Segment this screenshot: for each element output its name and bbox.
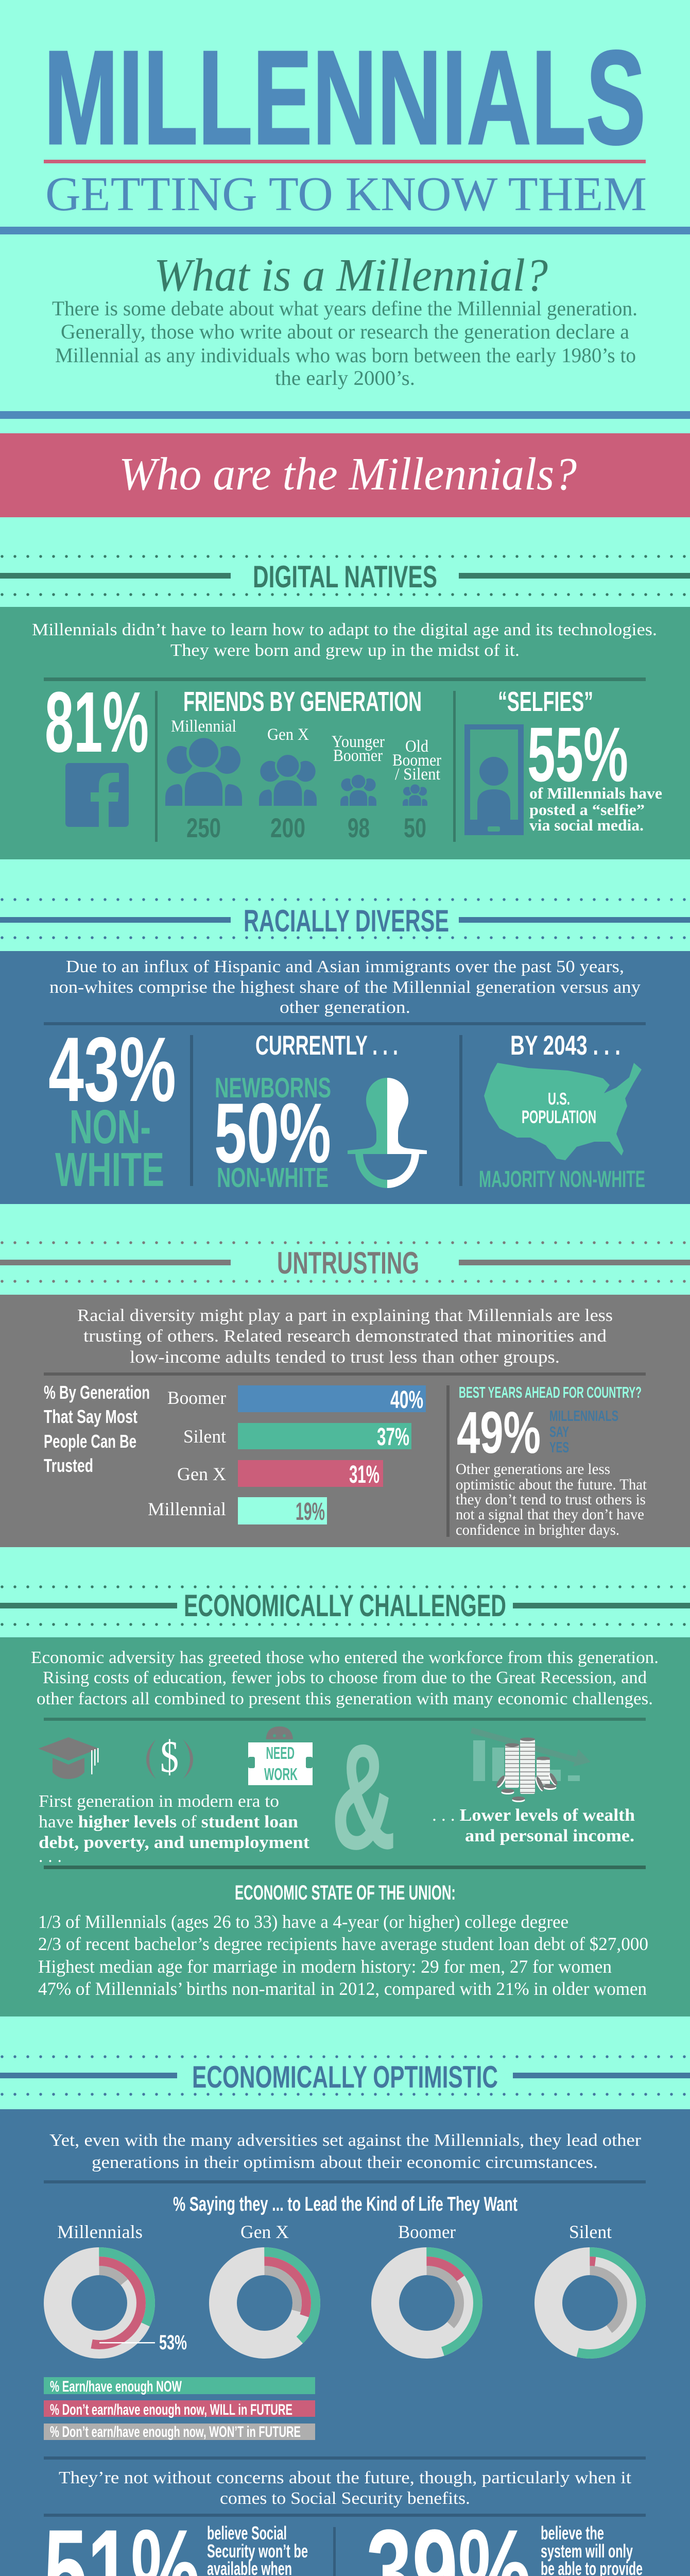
donut: boomer: Boomer: [398, 2222, 456, 2242]
chart title: % Saying they ... to Lead the Kind of Life They Want: [173, 2193, 518, 2215]
panel background: [0, 1637, 690, 2016]
younger boomer friends: Younger: [332, 733, 385, 751]
donut: gen x: [214, 2222, 316, 2354]
stat: 49 percent: 49%: [457, 1400, 541, 1466]
social security text: [59, 2468, 632, 2508]
bar: boomer: Boomer: [167, 1387, 226, 1408]
map: united states: U.S.: [548, 1089, 570, 1108]
text: first generation: First generation in modern era to: [39, 1792, 279, 1811]
bar: gen x: [177, 1460, 383, 1488]
panel intro text: Rising costs of education, fewer jobs to choose from due to the Great Recession, and: [43, 1668, 647, 1687]
younger boomer friends: [332, 733, 385, 843]
heading text: RACIALLY DIVERSE: [244, 904, 449, 938]
stat: 55 percent: 55%: [527, 711, 628, 798]
icon: graduation cap: [38, 1737, 99, 1779]
heading text: ECONOMICALLY OPTIMISTIC: [192, 2060, 498, 2094]
icon: need work sign: WORK: [264, 1765, 298, 1784]
bar: silent: 37%: [377, 1423, 409, 1451]
text: lower levels: and personal income.: [465, 1826, 634, 1845]
friends chart: [165, 717, 441, 843]
panel: untrusting: [0, 1295, 690, 1547]
panel background: [0, 951, 690, 1204]
banner: who are the millennials: [0, 433, 690, 517]
panel background: [0, 607, 690, 859]
panel intro text: other generation.: [280, 998, 410, 1017]
panel intro text: Economic adversity has greeted those who entered the workforce from this generation.: [31, 1648, 659, 1667]
old boomer and silent friends: Boomer: [392, 751, 441, 770]
section heading: untrusting: [0, 1243, 690, 1281]
panel intro text: other factors all combined to present this generation with many economic challenges.: [37, 1689, 653, 1708]
gen x friends: Gen X: [267, 725, 309, 744]
legend: will in future: % Don’t earn/have enough now, WILL in FUTURE: [50, 2401, 292, 2418]
panel: economically optimistic: [0, 2109, 690, 2576]
panel intro text: [49, 2131, 642, 2172]
map: united states: POPULATION: [522, 1107, 596, 1127]
economic state facts: [38, 1911, 648, 1999]
panel intro text: trusting of others. Related research demonstrated that minorities and: [83, 1327, 607, 1346]
stat: newborns 50 percent: [214, 1072, 331, 1193]
donut: millennials: [48, 2222, 187, 2354]
heading text: ECONOMICALLY CHALLENGED: [184, 1588, 506, 1623]
panel background: [0, 1295, 690, 1547]
heading text: DIGITAL NATIVES: [253, 560, 437, 594]
economic state facts: Highest median age for marriage in modern history: 29 for men, 27 for women: [38, 1956, 612, 1977]
millennials say yes: [549, 1408, 618, 1456]
old boomer and silent friends: Old: [405, 737, 428, 756]
selfie caption: [529, 784, 662, 834]
millennial friends: [165, 717, 242, 843]
millennials say yes: YES: [549, 1439, 569, 1456]
panel intro text: [49, 957, 641, 1017]
donut: millennials: Millennials: [57, 2222, 143, 2242]
bar: silent: Silent: [183, 1426, 226, 1447]
economic state facts: 1/3 of Millennials (ages 26 to 33) have a 4-year (or higher) college degree: [38, 1911, 568, 1932]
legend: [44, 2377, 315, 2441]
chart title: % By Generation: [44, 1382, 150, 1403]
panel intro text: [31, 1648, 659, 1708]
millennial friends: Millennial: [171, 717, 236, 736]
stat: 51 percent: believe Social: [207, 2522, 287, 2544]
section heading: economically optimistic: [0, 2057, 690, 2094]
title underline: [44, 160, 646, 163]
optimism text: optimistic about the future. That: [456, 1476, 647, 1493]
friends heading: FRIENDS BY GENERATION: [183, 686, 422, 717]
legend: now: [44, 2377, 315, 2395]
economic state facts: 47% of Millennials’ births non-marital in 2012, compared with 21% in older women: [38, 1978, 647, 1999]
bar chart: trust by generation: [148, 1385, 426, 1526]
currently heading: CURRENTLY . . .: [255, 1030, 398, 1061]
donut: boomer: [376, 2222, 478, 2354]
ampersand: &: [331, 1713, 396, 1880]
bar: boomer: [167, 1385, 426, 1414]
panel intro text: Yet, even with the many adversities set against the Millennials, they lead other: [49, 2131, 642, 2150]
section heading: digital natives: [0, 556, 690, 595]
stat: 43 percent non-white: WHITE: [55, 1143, 164, 1196]
economic state heading: ECONOMIC STATE OF THE UNION:: [235, 1882, 456, 1904]
intro: what is a millennial: [0, 250, 690, 419]
text: first generation: have higher levels of student loan: [39, 1812, 298, 1832]
millennial friends: 250: [186, 813, 221, 843]
top band: [0, 227, 690, 234]
younger boomer friends: 98: [348, 813, 370, 843]
bar: millennial: 19%: [296, 1498, 325, 1526]
icon: dollar in parentheses: [146, 1732, 193, 1782]
stat: 39 percent: believe the: [541, 2522, 604, 2544]
chart title: [44, 1382, 150, 1476]
section heading: economically challenged: [0, 1587, 690, 1624]
intro text: There is some debate about what years define the Millennial generation.: [52, 297, 637, 320]
intro heading: What is a Millennial?: [154, 250, 548, 301]
intro text: Millennial as any individuals who was born between the early 1980’s to: [55, 344, 636, 367]
selfies heading: “SELFIES”: [498, 686, 593, 717]
chart title: Trusted: [44, 1455, 93, 1476]
donut: gen x: Gen X: [240, 2222, 289, 2242]
panel intro text: [77, 1306, 613, 1367]
panel intro text: Due to an influx of Hispanic and Asian immigrants over the past 50 years,: [66, 957, 624, 976]
selfie caption: of Millennials have: [529, 784, 662, 802]
millennials say yes: MILLENNIALS: [549, 1408, 618, 1425]
panel intro text: generations in their optimism about their economic circumstances.: [92, 2153, 598, 2172]
stat: 43 percent non-white: [48, 1018, 176, 1196]
panel intro text: non-whites comprise the highest share of the Millennial generation versus any: [49, 978, 641, 997]
donut: silent: [539, 2222, 641, 2354]
lower band: [0, 411, 690, 419]
text: lower levels: . . . Lower levels of wealth: [432, 1806, 635, 1825]
subtitle: GETTING TO KNOW THEM: [45, 167, 647, 221]
legend: won't in future: [44, 2424, 315, 2441]
donut: millennials: 53%: [159, 2331, 187, 2354]
younger boomer friends: Boomer: [333, 747, 383, 765]
by 2043 heading: BY 2043 . . .: [510, 1030, 620, 1061]
panel: racially diverse: [0, 951, 690, 1204]
donut charts: [48, 2222, 641, 2354]
panel intro text: low-income adults tended to trust less than other groups.: [130, 1348, 560, 1367]
optimism text: not a signal that they don’t have: [456, 1506, 644, 1523]
stat: 43 percent non-white: 43%: [48, 1018, 176, 1121]
stat: newborns 50 percent: 50%: [214, 1086, 331, 1180]
stat: newborns 50 percent: NEWBORNS: [215, 1072, 331, 1104]
section heading: racially diverse: [0, 900, 690, 938]
icon: falling chart with coins: [471, 1727, 591, 1802]
bar: gen x: 31%: [349, 1461, 380, 1488]
social security text: comes to Social Security benefits.: [220, 2489, 470, 2508]
legend: won't in future: % Don’t earn/have enough now, WON’T in FUTURE: [50, 2424, 301, 2441]
old boomer and silent friends: [392, 737, 441, 843]
panel intro text: [32, 620, 657, 660]
millennials say yes: SAY: [549, 1424, 569, 1440]
optimism text: Other generations are less: [456, 1461, 610, 1478]
bar: millennial: [148, 1497, 327, 1526]
text: lower levels: [432, 1806, 635, 1845]
selfie caption: posted a “selfie”: [529, 801, 645, 819]
stat: 81 percent on facebook: 81%: [45, 674, 149, 770]
icon: need work sign: [248, 1726, 313, 1785]
chart title: That Say Most: [44, 1406, 137, 1427]
stat: 43 percent non-white: NON-: [70, 1100, 151, 1154]
banner heading: Who are the Millennials?: [119, 449, 577, 500]
banner background: [0, 433, 690, 517]
bar: gen x: Gen X: [177, 1464, 226, 1484]
bar: silent: [183, 1423, 411, 1451]
gen x friends: 200: [270, 813, 305, 843]
social security text: They’re not without concerns about the future, though, particularly when it: [59, 2468, 632, 2487]
chart title: People Can Be: [44, 1431, 136, 1452]
icon: facebook: [65, 763, 129, 827]
legend: now: % Earn/have enough NOW: [50, 2378, 182, 2395]
legend: will in future: [44, 2400, 315, 2418]
old boomer and silent friends: / Silent: [395, 765, 440, 784]
selfie caption: via social media.: [529, 816, 644, 834]
icon: pacifier: [348, 1078, 427, 1188]
stat: newborns 50 percent: NON-WHITE: [217, 1162, 329, 1193]
title block: [0, 23, 690, 234]
icon: need work sign: NEED: [266, 1743, 295, 1762]
stat: 39 percent: system will only: [541, 2540, 633, 2562]
panel intro text: They were born and grew up in the midst of it.: [170, 641, 520, 660]
optimism text: [456, 1461, 647, 1538]
panel intro text: Millennials didn’t have to learn how to adapt to the digital age and its technologies.: [32, 620, 657, 639]
panel intro text: Racial diversity might play a part in explaining that Millennials are less: [77, 1306, 613, 1325]
gen x friends: [259, 725, 317, 843]
panel: economically challenged: [0, 1637, 690, 2016]
text: first generation: [39, 1792, 310, 1866]
donut: silent: Silent: [569, 2222, 612, 2242]
intro text: Generally, those who write about or research the generation declare a: [61, 320, 629, 343]
text: first generation: debt, poverty, and unemployment: [39, 1833, 310, 1852]
icon: dollar in parentheses: $: [160, 1732, 179, 1782]
economic state facts: 2/3 of recent bachelor’s degree recipients have average student loan debt of $27,000: [38, 1934, 648, 1954]
old boomer and silent friends: 50: [404, 813, 426, 843]
heading text: UNTRUSTING: [277, 1246, 419, 1280]
intro text: the early 2000’s.: [275, 366, 415, 389]
stat: 51 percent: Security won’t be: [207, 2540, 308, 2562]
panel background: [0, 2109, 690, 2576]
icon: smartphone: [464, 724, 524, 835]
bar: boomer: 40%: [390, 1386, 423, 1414]
bar: millennial: Millennial: [148, 1499, 226, 1519]
intro text: [52, 297, 637, 389]
optimism text: confidence in brighter days.: [456, 1521, 619, 1538]
optimism text: they don’t tend to trust others is: [456, 1491, 646, 1508]
text: first generation: . . .: [39, 1847, 62, 1866]
map: united states: [484, 1063, 642, 1160]
panel: digital natives: [0, 607, 690, 859]
